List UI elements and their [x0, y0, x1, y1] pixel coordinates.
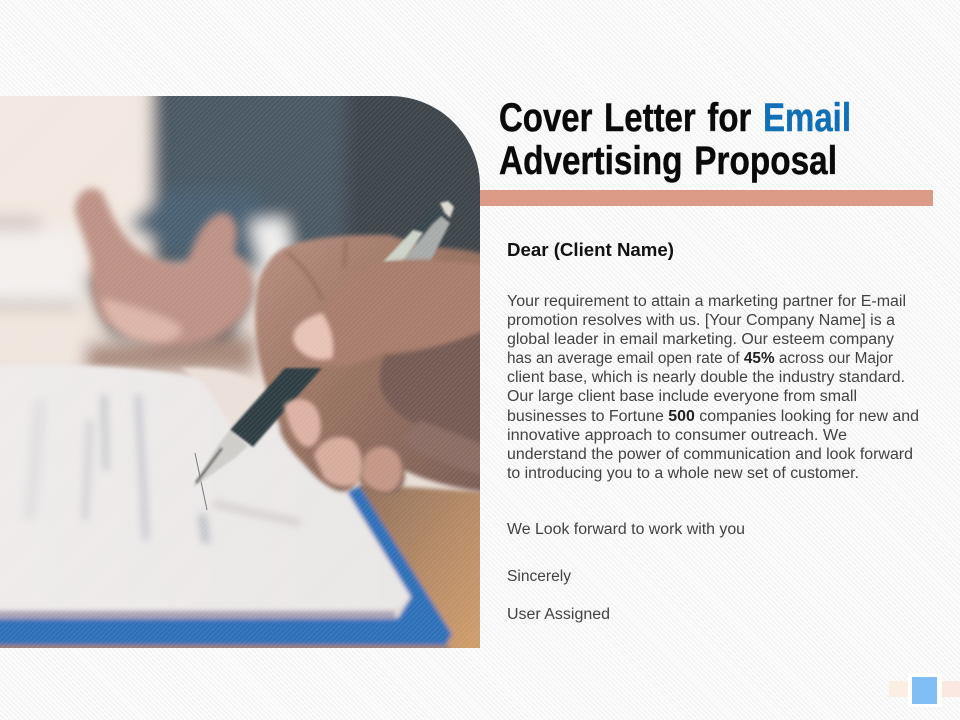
- folder: [0, 486, 452, 645]
- body paragraph: client base, which is nearly double the industry standard.: [507, 369, 905, 386]
- blurred document text: [30, 395, 300, 543]
- sign-off: Sincerely: [507, 568, 571, 585]
- photo: hands signing a document: [0, 96, 480, 648]
- accent bar: [480, 190, 933, 206]
- writing hand: [255, 235, 485, 494]
- body paragraph: Our large client base include everyone from small: [507, 388, 857, 405]
- title: Cover Letter for Email: [499, 96, 851, 140]
- body paragraph: global leader in email marketing. Our esteem company: [507, 331, 894, 348]
- closing line: We Look forward to work with you: [507, 521, 745, 538]
- paper: [0, 365, 490, 655]
- corner decoration: [889, 673, 960, 707]
- body paragraph: understand the power of communication and look forward: [507, 446, 913, 463]
- body paragraph: [507, 293, 919, 482]
- wood table: [358, 484, 490, 655]
- body paragraph: to introducing you to a whole new set of customer.: [507, 465, 859, 482]
- photo tint overlay: [0, 96, 480, 648]
- body paragraph: promotion resolves with us. [Your Company Name] is a: [507, 312, 895, 329]
- body paragraph: Your requirement to attain a marketing partner for E-mail: [507, 293, 906, 310]
- thumb and fingers: [284, 240, 485, 492]
- blurred background: [0, 96, 480, 492]
- body paragraph: has an average email open rate of 45% across our Major: [507, 350, 893, 367]
- title: [499, 96, 851, 183]
- title: Advertising Proposal: [499, 139, 837, 183]
- pen: [192, 201, 454, 488]
- greeting: Dear (Client Name): [507, 240, 674, 260]
- body paragraph: businesses to Fortune 500 companies looking for new and: [507, 408, 919, 425]
- body paragraph: innovative approach to consumer outreach. We: [507, 427, 847, 444]
- left hand: [75, 188, 253, 346]
- signature name: User Assigned: [507, 606, 610, 623]
